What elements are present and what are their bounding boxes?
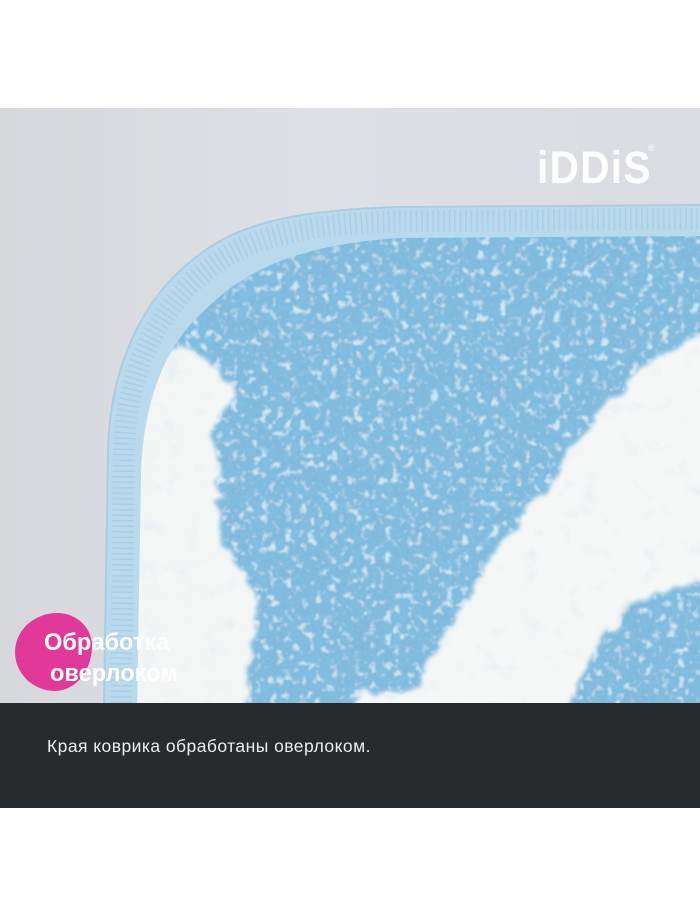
badge: overlock [15,613,178,691]
caption text: Края коврика обработаны оверлоком. [47,736,371,756]
badge text line 1: Обработка [44,630,169,656]
logo: IDDIS [537,142,655,193]
registered mark: ® [648,143,655,153]
blue pile [120,225,700,715]
logo wordmark: iDDiS [537,142,652,193]
badge text line 2: оверлоком [50,661,178,687]
white stripes [120,325,700,715]
overlock edge [104,205,700,703]
background [0,108,700,703]
caption bar [0,703,700,808]
photo: rug corner with overlock edge [0,108,700,703]
pink blob [15,613,92,691]
